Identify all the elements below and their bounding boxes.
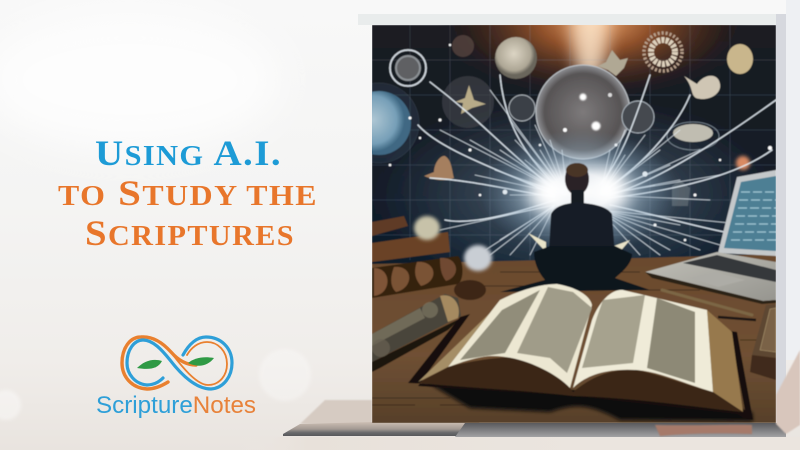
tan artefact <box>424 156 454 180</box>
lantern <box>414 216 440 240</box>
desk <box>372 254 776 423</box>
head <box>564 171 590 194</box>
large glass sphere <box>536 65 630 159</box>
illustration: person studying scripture with AI <box>372 25 776 423</box>
title line 2: TO STUDY THE <box>58 173 318 213</box>
star dots <box>389 44 772 241</box>
icon: infinity loop <box>122 337 232 389</box>
open Bible <box>408 284 753 421</box>
left page <box>448 284 592 388</box>
digital background <box>372 25 776 265</box>
pen <box>662 290 752 315</box>
floating orbs and artefacts <box>339 33 753 206</box>
black cover <box>408 314 753 420</box>
central glow <box>486 134 673 246</box>
ornate scroll <box>372 294 461 372</box>
small sphere <box>622 101 654 133</box>
torso <box>549 202 614 247</box>
crossed legs <box>500 246 650 292</box>
sun ornament <box>644 33 682 71</box>
logo wordmark: ScriptureNotes <box>96 392 256 419</box>
icon: green leaves <box>137 357 214 369</box>
orange spark <box>736 156 750 170</box>
blue planet <box>372 82 420 164</box>
ribbed spine book <box>372 256 486 300</box>
light rays <box>418 75 776 260</box>
picture frame band <box>240 0 800 450</box>
shadows <box>430 384 753 421</box>
page edge left <box>418 300 500 382</box>
right page <box>573 290 713 392</box>
title line 3: SCRIPTURES <box>85 213 295 253</box>
silhouette of person <box>500 163 650 292</box>
open laptop <box>645 170 776 304</box>
ring medallion <box>390 50 426 86</box>
logo: ScriptureNotes <box>96 337 256 419</box>
title <box>58 133 318 253</box>
small wire sphere <box>509 95 535 121</box>
dim nebula <box>452 35 474 57</box>
glittering artefact <box>464 245 492 271</box>
small star artefact <box>598 50 628 76</box>
title line 1: USING A.I. <box>95 133 282 173</box>
glass lantern <box>672 180 690 206</box>
stack of old books <box>372 216 492 300</box>
text blocks <box>460 290 540 360</box>
book in hands <box>528 233 546 252</box>
cloud artefact <box>684 76 720 99</box>
golden star <box>442 76 494 128</box>
gold cluster <box>727 44 753 74</box>
small closed book <box>750 304 776 380</box>
page edge right <box>707 310 743 412</box>
beige planet <box>495 37 537 79</box>
bowl artefact <box>667 122 719 150</box>
underside <box>418 357 743 412</box>
top books <box>372 232 450 262</box>
